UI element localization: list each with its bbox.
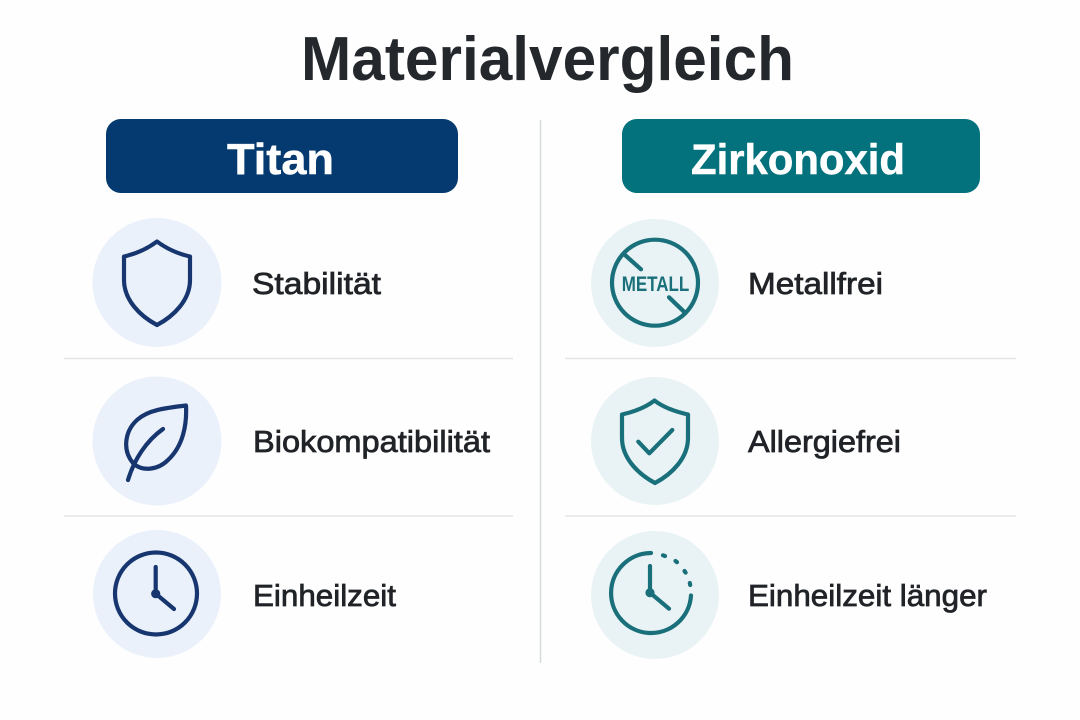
icon: clock: [115, 552, 197, 634]
header: Titan: [106, 119, 458, 193]
icon: shield: [124, 242, 190, 325]
label: Stabilität: Stabilität: [252, 266, 381, 301]
row: Einheilzeit: [93, 530, 396, 658]
label: Einheilzeit länger: Einheilzeit länger: [748, 578, 987, 613]
label: Biokompatibilität: Biokompatibilität: [253, 424, 490, 459]
icon: shield with check: [622, 400, 688, 483]
row: Stabilität: [92, 218, 381, 347]
icon: no metal: METALL: [622, 273, 689, 296]
row: Allergiefrei: [591, 377, 901, 505]
row: Metallfrei: [591, 219, 883, 347]
row: Einheilzeit länger: [591, 531, 987, 659]
panel: Titan: [92, 119, 490, 658]
row: Biokompatibilität: [92, 376, 490, 506]
icon: clock longer: [611, 553, 691, 633]
icon: no metal: [612, 240, 698, 326]
label: Allergiefrei: Allergiefrei: [748, 424, 901, 459]
header: Titan: Titan: [227, 135, 334, 184]
label: Metallfrei: Metallfrei: [748, 266, 883, 301]
header: Zirkonoxid: Zirkonoxid: [691, 136, 905, 184]
icon: leaf: [126, 406, 186, 480]
header: Zirkonoxid: [622, 119, 980, 193]
title: Materialvergleich: [301, 25, 794, 94]
panel: Zirkonoxid: [591, 119, 987, 659]
label: Einheilzeit: Einheilzeit: [253, 578, 396, 613]
